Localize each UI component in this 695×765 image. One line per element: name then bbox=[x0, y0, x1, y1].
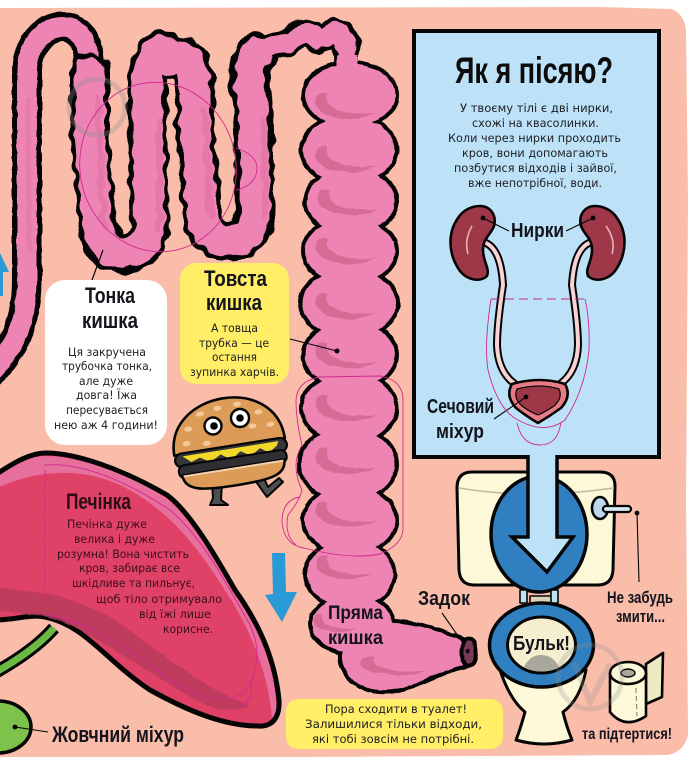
title: Як я пісяю? bbox=[455, 50, 613, 91]
label: rectum: кишка bbox=[328, 628, 383, 649]
flush handle bbox=[592, 497, 631, 519]
label: and wipe: та підтертися! bbox=[582, 726, 672, 743]
text: small intestine description: нею аж 4 години! bbox=[54, 418, 158, 432]
label: do not forget to flush: змити... bbox=[616, 607, 665, 626]
label: bladder: Сечовий bbox=[427, 396, 494, 418]
green bile duct bbox=[0, 628, 54, 672]
icon: toilet paper roll bbox=[610, 653, 663, 722]
toilet foot and bowl base bbox=[500, 670, 586, 744]
heading: large intestine bbox=[204, 266, 268, 315]
label: gurgle: Бульк! bbox=[513, 633, 570, 655]
toilet lid bbox=[491, 476, 587, 592]
text: small intestine description: пересувається bbox=[66, 403, 148, 417]
liver shading bbox=[0, 588, 250, 710]
colon outlines bbox=[301, 64, 464, 690]
text: liver description bbox=[57, 517, 222, 636]
text: large intestine description bbox=[190, 321, 279, 379]
leader: large intestine bbox=[290, 339, 340, 354]
right kidney bbox=[580, 206, 624, 280]
cover under panel join bbox=[530, 452, 555, 460]
toilet bowl hole bbox=[508, 617, 576, 673]
left edge blue arrow bbox=[0, 253, 9, 296]
gallbladder bbox=[0, 701, 48, 753]
toilet tank bbox=[457, 472, 615, 585]
text: kidneys explanation: позбутися відходів і зайвої, bbox=[454, 161, 617, 175]
heading: liver: Печінка bbox=[66, 489, 132, 514]
heading: large intestine: Товста bbox=[204, 266, 268, 291]
left kidney bbox=[450, 206, 495, 280]
anus end cap bbox=[462, 638, 476, 666]
heading: small intestine: Тонка bbox=[85, 283, 136, 308]
large intestine bbox=[301, 55, 476, 690]
heading: large intestine: кишка bbox=[206, 290, 263, 315]
text: small intestine description: але дуже bbox=[79, 374, 133, 388]
colon fill bbox=[301, 55, 464, 690]
hinges bbox=[520, 590, 558, 604]
callout: time to go to the toilet: які тобі зовсім не потрібні. bbox=[312, 732, 474, 746]
label: kidneys: Нирки bbox=[511, 220, 564, 242]
text: liver description: розумна! Вона чистить bbox=[57, 547, 189, 561]
text: liver description: Печінка дуже bbox=[67, 517, 147, 531]
liver highlight rim bbox=[0, 456, 276, 718]
text: large intestine description: трубка — це bbox=[199, 336, 269, 350]
label: bladder bbox=[427, 396, 526, 443]
text: liver description: від їжі лише bbox=[139, 607, 211, 621]
long smooth section of the tube bbox=[0, 27, 90, 378]
toilet bbox=[457, 472, 631, 744]
print guide lines over intestines bbox=[64, 68, 403, 556]
text: liver description: велика і дуже bbox=[74, 532, 155, 546]
text: kidneys explanation: У твоєму тілі є дві нирки, bbox=[460, 101, 613, 115]
callout: time to go to the toilet bbox=[286, 699, 503, 749]
bladder bbox=[509, 380, 568, 423]
text: kidneys explanation: вже непотрібної, води. bbox=[468, 176, 602, 190]
liver bbox=[0, 453, 279, 726]
heading: small intestine bbox=[82, 283, 139, 333]
text: liver description: корисне. bbox=[163, 622, 213, 636]
toilet seat bbox=[490, 603, 594, 687]
label: anus: Задок bbox=[418, 588, 471, 610]
burger body bbox=[167, 390, 292, 494]
watermark: bottom right bbox=[558, 645, 622, 709]
text: small intestine description: Ця закручена bbox=[68, 345, 146, 359]
ureters bbox=[486, 243, 589, 384]
arrow: blue down arrow bbox=[265, 553, 297, 622]
flush arrow bbox=[512, 455, 573, 572]
text: large intestine description: зупинка харчів. bbox=[190, 365, 279, 379]
text: liver description: щоб тіло отримувало bbox=[96, 592, 222, 606]
callout: time to go to the toilet: Пора сходити в туалет! bbox=[325, 702, 467, 716]
burger legs bbox=[210, 474, 283, 505]
burger eyes bbox=[204, 409, 249, 434]
liver shape bbox=[0, 453, 279, 726]
text: liver description: кров, забирає все bbox=[79, 561, 180, 575]
label: do not forget to flush: Не забудь bbox=[607, 588, 673, 607]
text: kidneys explanation: кров, вони допомагають bbox=[462, 146, 608, 160]
small intestine bbox=[0, 27, 347, 378]
panel: small intestine text bbox=[45, 280, 167, 445]
panel: how I pee bbox=[414, 31, 659, 457]
text: small intestine description bbox=[54, 345, 158, 432]
label: rectum bbox=[328, 603, 383, 649]
heading: small intestine: кишка bbox=[82, 308, 139, 333]
text: small intestine description: трубочка тонка, bbox=[62, 359, 152, 373]
text: kidneys explanation: схожі на квасолинки. bbox=[472, 116, 599, 130]
label: anus bbox=[418, 588, 471, 643]
liver guide lines bbox=[45, 465, 257, 706]
label: bladder: міхур bbox=[436, 421, 484, 443]
icon: walking burger bbox=[167, 390, 292, 505]
text: large intestine description: остання bbox=[212, 350, 257, 364]
text: small intestine description: довга! Їжа bbox=[76, 387, 137, 402]
callout: time to go to the toilet: Залишилися тільки відходи, bbox=[305, 717, 482, 731]
text: large intestine description: А товща bbox=[211, 321, 258, 335]
text: kidneys explanation bbox=[448, 101, 621, 190]
tank shadow bbox=[459, 488, 614, 494]
coiled section of the tube bbox=[90, 31, 347, 253]
text: kidneys explanation: Коли через нирки проходить bbox=[448, 131, 621, 145]
label: kidneys bbox=[483, 218, 593, 242]
leader: small intestine bbox=[92, 250, 103, 280]
label: rectum: Пряма bbox=[328, 603, 383, 624]
text: liver description: шкідливе та пильнує, bbox=[72, 576, 195, 590]
label: do not forget to flush bbox=[607, 511, 673, 626]
panel: large intestine text bbox=[180, 263, 289, 384]
watermark: top left bbox=[69, 79, 125, 135]
bladder guide lines bbox=[487, 299, 589, 445]
label: gallbladder: Жовчний міхур bbox=[51, 722, 184, 747]
colon shading marks bbox=[314, 93, 427, 675]
